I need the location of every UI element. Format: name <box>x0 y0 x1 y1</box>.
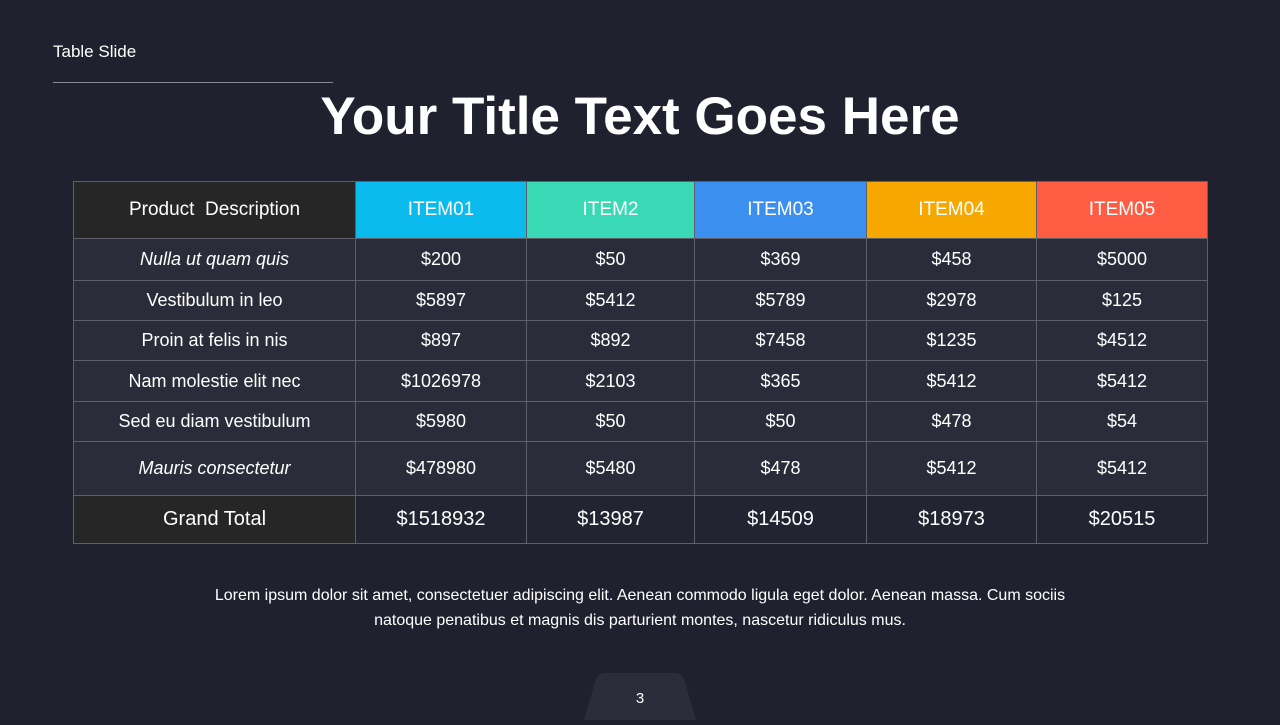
data table: $478 <box>931 411 972 431</box>
data table: $369 <box>760 249 801 269</box>
data table: $5412 <box>1097 458 1147 478</box>
data table: Grand Total <box>163 508 266 530</box>
data table: Nulla ut quam quis <box>140 249 289 269</box>
data table: $54 <box>1107 411 1137 431</box>
data table: $4512 <box>1097 330 1147 350</box>
title: Your Title Text Goes Here <box>320 87 960 146</box>
body text <box>215 587 1065 629</box>
data table: $892 <box>590 330 631 350</box>
data table <box>73 181 1208 544</box>
label: Table Slide: Table Slide <box>53 42 136 61</box>
data table: Vestibulum in leo <box>146 290 283 310</box>
data table: $2978 <box>926 290 977 310</box>
data table: $14509 <box>747 508 814 530</box>
data table: $478 <box>760 458 801 478</box>
data table: $5412 <box>926 458 977 478</box>
data table: Product Description <box>129 199 300 220</box>
data table: $7458 <box>755 330 806 350</box>
data table: $897 <box>421 330 461 350</box>
data table: $1518932 <box>396 508 485 530</box>
data table: $5980 <box>416 411 466 431</box>
data table: Nam molestie elit nec <box>128 370 301 390</box>
data table: $5480 <box>585 458 636 478</box>
data table: $2103 <box>585 370 636 390</box>
data table: ITEM01 <box>408 199 474 220</box>
page number tab: 3 <box>636 690 644 707</box>
data table: $365 <box>760 370 801 390</box>
data table: $5412 <box>1097 370 1147 390</box>
data table: $50 <box>595 411 626 431</box>
data table: $5412 <box>585 290 636 310</box>
data table: $5789 <box>755 290 806 310</box>
body text: natoque penatibus et magnis dis parturient montes, nascetur ridiculus mus. <box>374 612 906 629</box>
data table: $5412 <box>926 370 977 390</box>
data table: $458 <box>931 249 972 269</box>
data table: $18973 <box>918 508 985 530</box>
data table: $50 <box>595 249 626 269</box>
data table: $478980 <box>406 458 476 478</box>
data table: $125 <box>1102 290 1142 310</box>
data table: $5897 <box>416 290 466 310</box>
data table: $13987 <box>577 508 644 530</box>
data table: ITEM05 <box>1089 199 1155 220</box>
data table: ITEM2 <box>583 199 638 220</box>
data table: $5000 <box>1097 249 1147 269</box>
data table: ITEM03 <box>747 199 814 220</box>
page number tab <box>584 673 696 720</box>
data table: ITEM04 <box>918 199 985 220</box>
data table: Mauris consectetur <box>138 458 291 478</box>
data table: Sed eu diam vestibulum <box>118 411 311 431</box>
data table: $50 <box>765 411 796 431</box>
data table: $20515 <box>1089 508 1155 530</box>
data table: $1026978 <box>401 370 481 390</box>
data table: $200 <box>421 249 461 269</box>
data table: Proin at felis in nis <box>141 330 288 350</box>
body text: Lorem ipsum dolor sit amet, consectetuer adipiscing elit. Aenean commodo ligula eget dolor. Aenean massa. Cum sociis <box>215 587 1065 604</box>
data table: $1235 <box>926 330 977 350</box>
